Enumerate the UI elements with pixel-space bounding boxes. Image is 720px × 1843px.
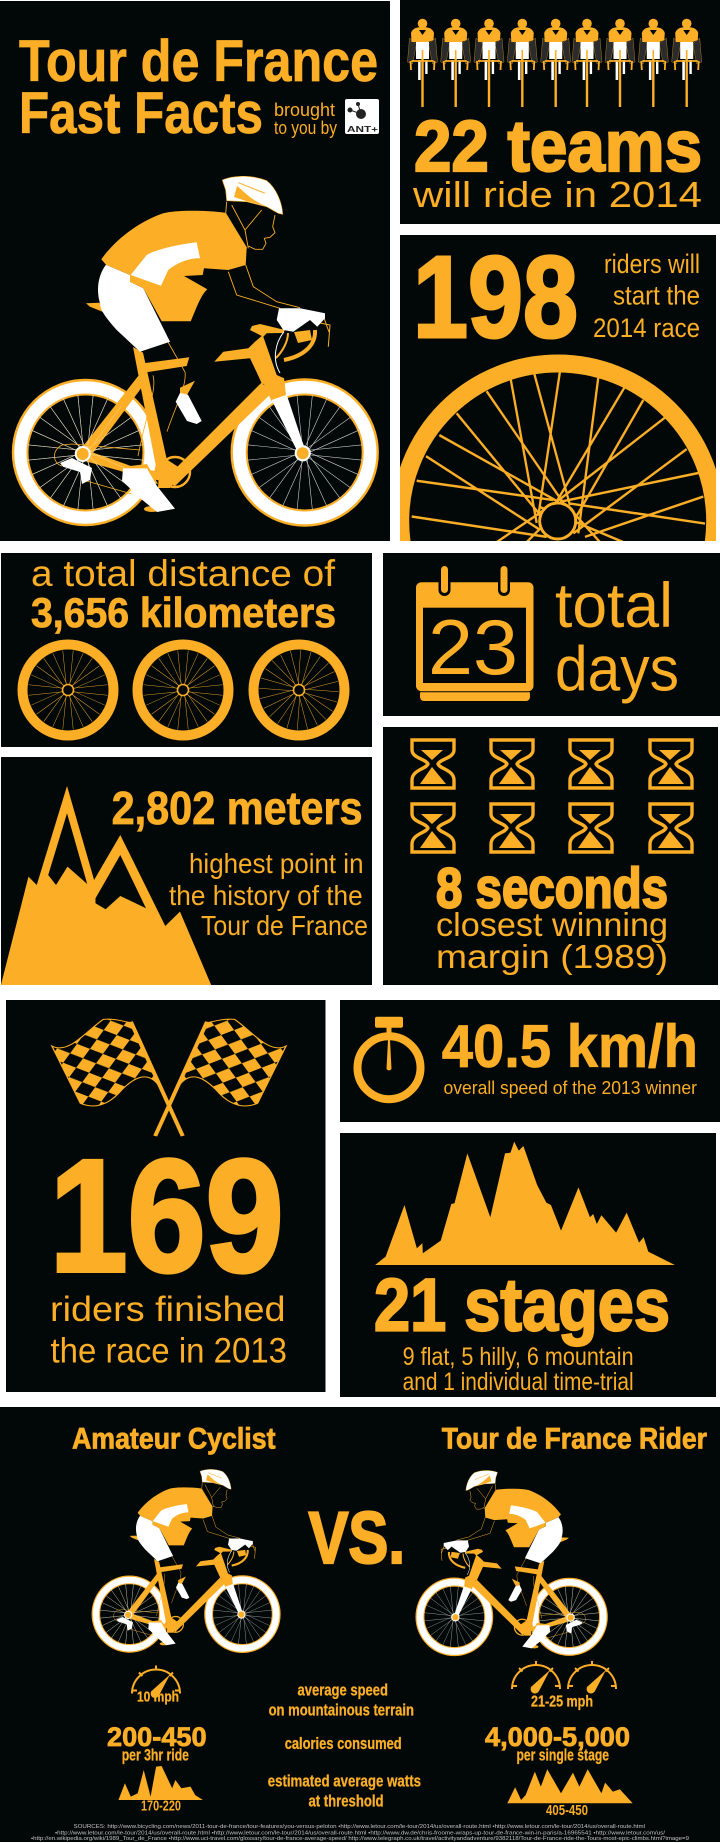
text: total days: total [555,571,673,641]
illustration: Tour de France rider [416,1470,607,1656]
heading: 2,802 meters: 2,802 meters [112,782,363,834]
stat: amateur calories: per 3hr ride [122,1746,189,1765]
text: stage breakdown [403,1343,634,1396]
panel: title and cyclist [0,1,390,541]
heading: 198: 198 [413,232,578,362]
panel: 22 teams [400,0,720,224]
heading: 40.5 km/h: 40.5 km/h [442,1013,698,1080]
title: Tour de France [19,29,378,94]
heading: Amateur Cyclist: Amateur Cyclist [72,1422,276,1455]
icon: calendar [416,564,534,701]
heading: 3,656 kilometers: 3,656 kilometers [31,589,336,636]
text: highest point description [169,848,368,941]
panel: 198 riders [400,235,716,541]
text: highest point description: highest point in [189,848,364,879]
text: watts label: at threshold [308,1792,384,1811]
label: 21-25 mph: 21-25 mph [531,1694,593,1711]
text: total days: days [555,635,679,705]
text: highest point description: Tour de France [201,910,368,941]
icon: row of nine riders [408,19,702,107]
heading: 8 seconds: 8 seconds [436,857,668,921]
icon: stopwatch [358,1017,420,1099]
illustration: cyclist on bike [13,176,378,526]
label: 405-450: 405-450 [546,1802,588,1819]
text: riders finished the race in 2013: riders finished [50,1290,286,1329]
text: riders will start the 2014 race: riders will [604,249,700,279]
text: sources: •http://en.wikipedia.org/wiki/1989_Tour_de_France •http://www.uci-travel.com/glossary/tour-de-france-average-speed/ http://www.telegraph.co.uk/travel/activityandadventure/9382118/Tour-de-France-ride-the-Tours-most-epic-climbs.html?image=9 [31,1836,689,1842]
stat: amateur calories [107,1722,207,1765]
panel: 169 finishers [6,1000,326,1392]
text: total days [555,571,679,705]
stat: pro calories: 4,000-5,000 [485,1722,630,1752]
stat: pro calories: per single stage [516,1746,609,1765]
text: riders finished the race in 2013: the race in 2013 [50,1332,287,1371]
icon: large wheel [400,354,716,541]
text: stage breakdown: and 1 individual time-trial [403,1368,634,1396]
icon: eight hourglasses [412,740,692,852]
icon: three wheels [22,644,345,736]
text: stage breakdown: 9 flat, 5 hilly, 6 mountain [403,1343,634,1371]
heading: 169: 169 [50,1126,284,1305]
label: 10 mph: 10 mph [137,1689,179,1706]
icon: ANT+ logo: ANT+ [347,125,378,134]
panel: 21 stages [340,1133,716,1397]
text: calories label: calories consumed [285,1734,402,1753]
panel: highest point [1,757,372,985]
heading: VS.: VS. [308,1498,405,1579]
text: highest point description: the history of the [169,880,363,911]
text: riders will start the 2014 race: 2014 race [593,313,700,343]
text: closest winning margin: closest winning [436,906,668,943]
text: a total distance of: a total distance of [31,553,336,594]
heading: 22 teams: 22 teams [414,107,702,187]
text: average speed label: average speed [298,1681,388,1700]
illustration: amateur cyclist [92,1469,280,1652]
sponsor line: to you by [274,118,337,138]
text: sources: SOURCES: http://www.bicycling.com/news/2011-tour-de-france/tour-features/you-versus-peloton •http://www.letour.com/le-tour/2014/us/overall-route.html •http://www.letour.com/le-tour/2014/us/overall-route.html [74,1824,645,1830]
sponsor line: brought [274,100,335,120]
sponsor line [274,100,337,138]
icon: calendar: 23 [428,603,518,691]
stat: pro calories [485,1722,630,1765]
panel: total distance [1,553,372,747]
title [19,29,378,146]
text: sources [31,1824,689,1842]
text: closest winning margin: margin (1989) [436,938,668,975]
icon: ANT+ logo [345,99,379,134]
text: riders finished the race in 2013 [50,1290,287,1371]
chart: pro watts profile [507,1769,633,1803]
panel: amateur versus pro [0,1407,720,1842]
text: will ride in 2014: will ride in 2014 [412,174,702,215]
stat: amateur calories: 200-450 [107,1722,207,1752]
chart: stage elevation profile [375,1142,675,1265]
text: closest winning margin [436,906,668,975]
label: 170-220: 170-220 [141,1798,181,1815]
panel: 23 total days [383,553,720,716]
icon: two pro speedometers [512,1661,616,1694]
text: riders will start the 2014 race: start the [613,280,700,310]
text: watts label: estimated average watts [268,1772,421,1791]
icon: crossed checkered flags [52,1019,286,1136]
text: sources: •http://www.letour.com/le-tour/2014/us/overall-route.html •http://www.letour.com/le-tour/2014/us/overall-route.html •http://www.dw.de/chris-froome-wraps-up-tour-de-france-win-in-paris/a-16965541 •http://www.letour.com/us/ [55,1830,665,1836]
title: Fast Facts [19,81,263,146]
heading: 21 stages: 21 stages [374,1264,670,1347]
text: overall speed of the 2013 winner: overall speed of the 2013 winner [444,1078,697,1098]
text: watts label [268,1772,421,1811]
text: average speed label: on mountainous terrain [269,1701,414,1720]
text: average speed label [269,1681,414,1720]
icon: amateur speedometer [132,1666,180,1698]
text: riders will start the 2014 race [593,249,700,343]
chart: amateur watts profile [118,1766,203,1800]
icon: mountain [1,786,211,985]
panel: overall speed [340,1000,720,1122]
panel: 8 seconds [383,727,718,985]
